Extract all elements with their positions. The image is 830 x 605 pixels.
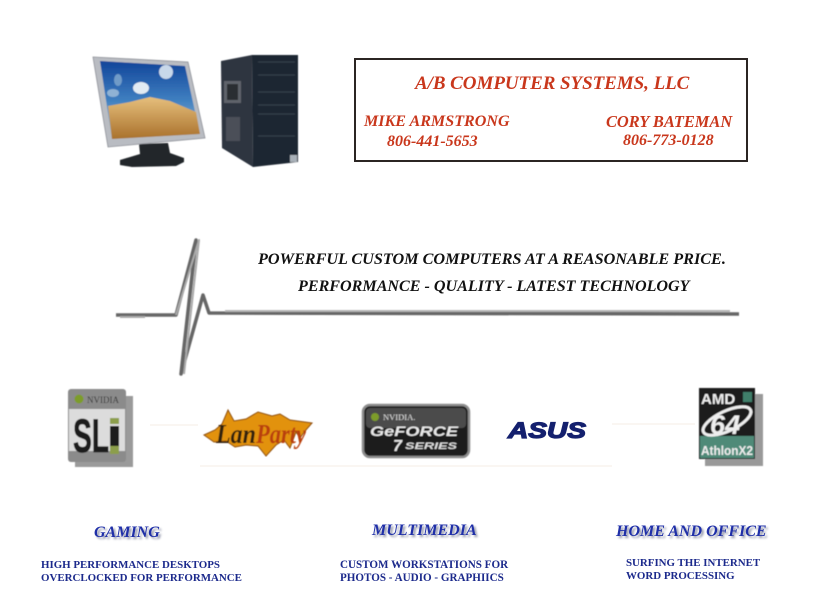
icon: computer monitor [92, 56, 206, 168]
icon: AMD 64 Athlon X2 logo [698, 387, 764, 466]
text: Mike Armstrong phone: 806-441-5653 [387, 133, 478, 150]
icon: heartbeat pulse line [115, 238, 740, 376]
heading: gaming: GAMING [94, 524, 160, 541]
icon: AMD 64 Athlon X2 logo: AthlonX2 [701, 444, 753, 458]
text: home and office description: SURFING THE INTERNET [626, 557, 760, 569]
icon: LanParty logo [202, 408, 314, 457]
icon: LanParty logo: Lan [215, 419, 256, 449]
text: home and office description [626, 557, 760, 582]
text: Mike Armstrong name: MIKE ARMSTRONG [364, 113, 510, 130]
icon: AMD 64 Athlon X2 logo: AMD [701, 391, 735, 408]
text: gaming description [41, 559, 242, 584]
text: slogan line two: PERFORMANCE - QUALITY - LATEST TECHNOLOGY [298, 278, 690, 295]
icon: computer tower [220, 54, 299, 168]
icon: GeForce 7 Series logo: NVIDIA. [383, 412, 415, 422]
text: gaming description: HIGH PERFORMANCE DESKTOPS [41, 559, 220, 571]
icon: GeForce 7 Series logo: GeFORCE [370, 423, 459, 439]
panel: company contact box [354, 58, 748, 162]
text: home and office description: WORD PROCESSING [626, 570, 735, 582]
icon: GeForce 7 Series logo [361, 403, 471, 459]
icon: AMD 64 Athlon X2 logo: 64 [710, 410, 740, 440]
text: Cory Bateman name: CORY BATEMAN [606, 112, 732, 131]
icon: NVIDIA SLI logo [67, 388, 134, 468]
text: gaming description: OVERCLOCKED FOR PERFORMANCE [41, 572, 242, 584]
heading: company name: A/B COMPUTER SYSTEMS, LLC [415, 73, 689, 94]
text: Cory Bateman phone: 806-773-0128 [623, 132, 714, 149]
heading: multimedia: MULTIMEDIA [372, 522, 477, 539]
heading: home and office: HOME AND OFFICE [616, 523, 767, 540]
text: multimedia description: CUSTOM WORKSTATIONS FOR [340, 559, 508, 571]
text: slogan line one: POWERFUL CUSTOM COMPUTERS AT A REASONABLE PRICE. [258, 250, 726, 268]
text: multimedia description: PHOTOS - AUDIO - GRAPHIICS [340, 572, 504, 584]
icon: GeForce 7 Series logo: 7 [393, 438, 403, 455]
icon: GeForce 7 Series logo: SERIES [405, 441, 457, 451]
icon: NVIDIA SLI logo: NVIDIA [87, 395, 119, 405]
icon: NVIDIA SLI logo: SL [73, 409, 109, 462]
text: multimedia description [340, 559, 508, 584]
icon: LanParty logo: Party [255, 419, 307, 449]
